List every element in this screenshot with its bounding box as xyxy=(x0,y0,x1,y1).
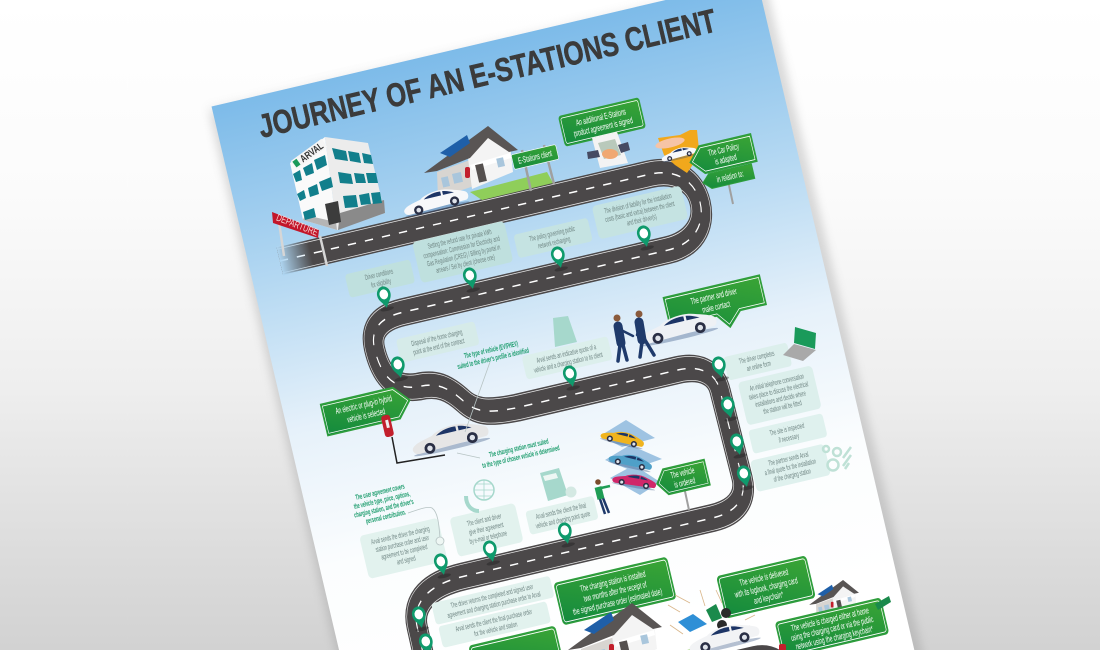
green note: user agreement: charging station, and the driver's xyxy=(354,499,415,520)
panel: division of liability: and their driver(s) xyxy=(626,214,658,228)
panel: client and driver agreement: give their agreement xyxy=(468,522,505,537)
panel: driver returns order xyxy=(431,576,555,625)
sign: electric or plug-in hybrid xyxy=(320,384,414,436)
person: driver xyxy=(595,479,610,514)
icon: charging card top right xyxy=(875,596,891,610)
departure sign: DEPARTURE xyxy=(275,212,320,238)
panel: partner final quote xyxy=(750,444,831,492)
title: JOURNEY OF AN E-STATIONS CLIENT xyxy=(255,2,720,146)
house: E-Stations client xyxy=(424,126,553,200)
sign: vehicle charged: using the charging card or via the public xyxy=(790,613,875,643)
panel: purchase order to driver xyxy=(359,518,448,579)
sign: electric or plug-in hybrid: vehicle is selected xyxy=(346,405,386,425)
panel: public network policy xyxy=(513,218,593,258)
icon: car policy shield xyxy=(654,130,699,173)
sign: vehicle delivered: and keychain* xyxy=(753,589,784,606)
icon: handshake on document xyxy=(587,132,630,168)
delivered items: logbook, card, keychain, confetti xyxy=(668,590,755,634)
panel: driver returns order: The driver returns the completed and signed user xyxy=(450,584,534,610)
sign: vehicle charged xyxy=(775,598,889,650)
panel: telephone conversation: An initial telephone conversation xyxy=(749,373,805,393)
sign: car policy adapted: in relation to: xyxy=(715,168,745,185)
panel: public network policy: The policy governing public xyxy=(529,226,576,244)
panel: driver returns order: agreement and charging station purchase order to Arval xyxy=(447,591,541,620)
small house top right xyxy=(809,580,877,619)
sign: electric or plug-in hybrid: An electric or plug-in hybrid xyxy=(334,392,393,417)
panel: final quote: vehicle and charging point quote xyxy=(535,511,592,531)
panel: driver conditions: for eligibility xyxy=(371,278,392,290)
sign: partner and driver: The partner and driver xyxy=(689,285,738,307)
poster shadow xyxy=(209,0,994,650)
sign: E-Stations client xyxy=(511,144,559,191)
sign: partner and driver xyxy=(663,275,769,341)
sign: vehicle is ordered: is ordered xyxy=(673,474,696,490)
sign: vehicle delivered: The vehicle is delivered xyxy=(738,566,789,588)
building: Arval office xyxy=(290,137,385,230)
panel: division of liability: The division of liability for the installation xyxy=(604,193,673,216)
sign: car policy adapted: is adapted xyxy=(714,151,738,167)
panel: division of liability: costs (basic and extra) between the client xyxy=(605,201,676,224)
panel: site inspected xyxy=(748,413,828,454)
leader lines xyxy=(408,362,490,545)
sign: product agreement: product agreement is signed xyxy=(573,114,634,139)
sign: car policy adapted xyxy=(687,134,757,204)
bottom charger xyxy=(779,644,786,650)
panel: online form xyxy=(723,342,792,381)
panel: partner final quote: The partner sends Arval xyxy=(768,451,809,468)
panel: refund rate: Gas Regulation (CREG) / Billing by portal in xyxy=(426,244,501,269)
panel: disposal of charging point: Disposal of the home charging xyxy=(411,329,463,349)
illustration: charger and EV xyxy=(381,414,491,463)
panel: partner final quote: a final quote for the installation xyxy=(764,458,817,478)
panel: refund rate: arrears / Set by client (choose one) xyxy=(436,254,496,275)
green note: charging station suited: The charging station must suited xyxy=(489,438,550,460)
panel: driver conditions: Driver conditions xyxy=(364,268,394,282)
panel: refund rate xyxy=(412,221,513,283)
sign: E-Stations client: E-Stations client xyxy=(517,147,553,166)
departure sign xyxy=(272,212,327,266)
sign: charging station installed xyxy=(554,557,676,625)
panel: indicative quote: Arval sends an indicative quote of a xyxy=(536,344,597,365)
icon: laptop xyxy=(783,327,816,361)
panel: disposal of charging point xyxy=(396,321,480,363)
panel: disposal of charging point: point at the end of the contract xyxy=(413,338,466,357)
sign: vehicle is ordered xyxy=(654,459,710,510)
panel: site inspected: if necessary xyxy=(778,433,800,445)
illustration: partner and driver handshake xyxy=(614,307,719,361)
sign: car policy adapted: The Car Policy xyxy=(707,140,740,158)
icon: telephone and globe xyxy=(466,480,494,511)
sign: product agreement: An additional E-Stations xyxy=(575,106,627,128)
panel: purchase order to driver: agreement to be completed xyxy=(381,544,428,562)
panel: client and driver agreement: by e-mail or telephone xyxy=(469,530,508,546)
panel: client and driver agreement xyxy=(449,503,524,557)
green note: user agreement: the vehicle type, price, options, xyxy=(353,491,411,511)
icon: calculator xyxy=(540,468,576,501)
green note: type of vehicle: suited to the driver's profile is identified xyxy=(457,347,530,372)
green note: user agreement: The user agreement covers xyxy=(355,483,406,502)
sign: product agreement xyxy=(559,98,645,146)
cut-off bottom sign xyxy=(469,626,562,650)
panel: online form: The driver completes xyxy=(739,351,775,366)
sign: vehicle is ordered: The vehicle xyxy=(669,464,696,481)
sign: vehicle delivered xyxy=(717,556,815,618)
sign: charging station installed: two months after the receipt of xyxy=(583,579,648,604)
location pins along the road xyxy=(375,224,754,650)
winding road xyxy=(280,165,815,650)
road start fade xyxy=(276,239,314,276)
panel: client and driver agreement: The client and driver xyxy=(466,513,502,529)
panel: public network policy: network recharging xyxy=(538,236,571,251)
panel: telephone conversation: installations and decide where xyxy=(755,390,807,410)
panel: telephone conversation xyxy=(738,365,822,425)
panel: site inspected: The site is inspected xyxy=(769,423,805,438)
green note: charging station suited: to the type of chosen vehicle is determined xyxy=(482,445,561,471)
sign: vehicle charged: The vehicle is charged either at home xyxy=(790,605,870,634)
sign: partner and driver: make contact xyxy=(701,298,731,315)
panel: final quote: Arval sends the client the final xyxy=(535,503,587,522)
icon: document xyxy=(553,316,577,347)
panel: refund rate: Setting the refund rate for private kWh xyxy=(427,229,493,251)
panel: indicative quote: vehicle and a charging station to its client xyxy=(533,352,604,375)
poster sheet xyxy=(212,0,985,650)
panel: indicative quote xyxy=(522,336,613,380)
panel: purchase order to driver: station purchase order and user xyxy=(375,535,430,555)
panel: division of liability xyxy=(592,186,688,239)
panel: final purchase order: for the vehicle and station xyxy=(474,621,518,639)
sign: vehicle delivered: with its logbook, charging card xyxy=(733,575,799,600)
panel: final quote xyxy=(525,496,599,535)
panel: purchase order to driver: and signed xyxy=(396,555,416,567)
house: bottom charging station xyxy=(568,603,697,650)
panel: refund rate: compensation: Commission for Electricity and xyxy=(423,236,501,261)
illustration: three ordered cars xyxy=(600,420,662,495)
green note: user agreement: personal contribution. xyxy=(365,509,407,526)
green note: user agreement xyxy=(350,482,417,528)
panel: final purchase order xyxy=(438,601,551,648)
sign: charging station installed: The charging station is installed xyxy=(579,568,647,594)
panel: telephone conversation: takes place to discuss the electrical xyxy=(748,381,809,402)
panel: driver conditions xyxy=(345,259,415,298)
panel: purchase order to driver: Arval sends the driver the charging xyxy=(371,526,431,547)
panel: online form: an online form xyxy=(746,361,772,374)
icon: gears xyxy=(823,446,851,470)
Arval sign: ARVAL xyxy=(298,140,326,164)
panel: partner final quote: of the charging station xyxy=(773,468,812,484)
panel: final purchase order: Arval sends the client the final purchase order xyxy=(455,609,533,634)
panel: telephone conversation: the station will be fitted xyxy=(763,400,803,416)
bottom white car xyxy=(686,619,761,650)
top white car xyxy=(401,184,470,219)
green note: type of vehicle: The type of vehicle (EV/PHEV) xyxy=(464,341,519,361)
sign: charging station installed: the signed purchase order (estimated date) xyxy=(572,586,663,617)
